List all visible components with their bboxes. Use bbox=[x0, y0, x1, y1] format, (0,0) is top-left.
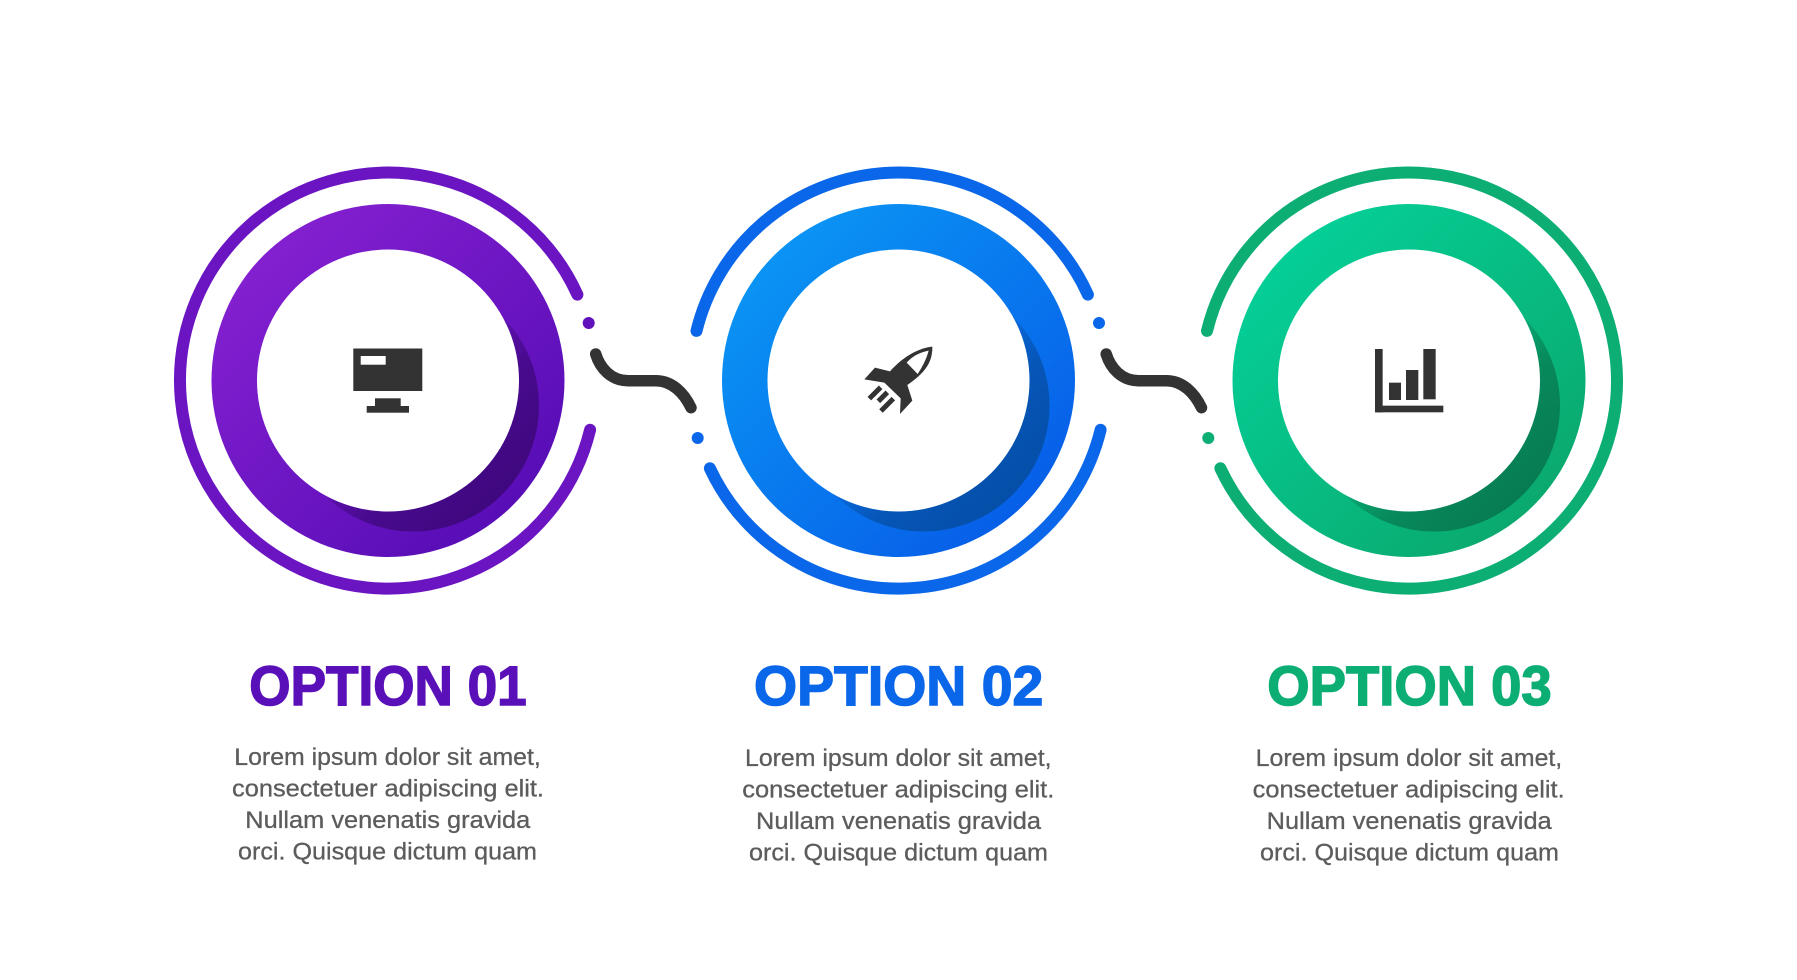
dot: blue left bbox=[692, 432, 704, 444]
dot: blue right bbox=[1093, 317, 1105, 329]
inner white circle bbox=[768, 250, 1030, 512]
text block: option 01 body: consectetuer adipiscing elit. bbox=[232, 776, 544, 802]
panel: option 01 bbox=[180, 173, 595, 866]
panel: option 02 bbox=[692, 173, 1105, 866]
text block: option 02 body: Nullam venenatis gravida bbox=[756, 808, 1042, 835]
connector: option 02 to option 03 bbox=[1106, 354, 1202, 408]
outer ring: blue bottom arc bbox=[710, 430, 1101, 589]
text block: option 03 body: Nullam venenatis gravida bbox=[1267, 808, 1552, 835]
outer ring: blue top arc bbox=[696, 173, 1088, 331]
ring: blue gradient bbox=[722, 204, 1075, 557]
text block: option 01 body: Lorem ipsum dolor sit amet, bbox=[234, 744, 541, 771]
text block: option 01 body bbox=[232, 744, 544, 866]
text block: option 02 body bbox=[742, 745, 1054, 866]
text block: option 01 body: Nullam venenatis gravida bbox=[245, 807, 531, 834]
text block: option 01 body: orci. Quisque dictum quam bbox=[238, 838, 537, 866]
inner white circle bbox=[257, 250, 519, 512]
ring: green gradient bbox=[1232, 204, 1586, 557]
ring shadow: blue bbox=[798, 280, 1050, 532]
outer ring: green arc bbox=[1207, 173, 1617, 589]
text block: option 02 body: consectetuer adipiscing elit. bbox=[742, 776, 1054, 804]
ring shadow: green bbox=[1308, 280, 1560, 532]
outer ring: purple arc bbox=[180, 173, 590, 589]
icon: monitor bbox=[353, 348, 422, 413]
text block: option 03 body: Lorem ipsum dolor sit amet, bbox=[1256, 745, 1562, 772]
dot: green bbox=[1202, 432, 1214, 444]
text block: option 03 body: consectetuer adipiscing elit. bbox=[1253, 776, 1565, 804]
text block: option 02 body: orci. Quisque dictum quam bbox=[749, 840, 1048, 866]
ring: purple gradient bbox=[212, 204, 564, 557]
text block: option 03 body bbox=[1253, 745, 1565, 866]
icon: rocket bbox=[864, 347, 932, 414]
panel: option 03 bbox=[1202, 173, 1617, 867]
text block: option 02 body: Lorem ipsum dolor sit amet, bbox=[745, 745, 1052, 772]
inner white circle bbox=[1278, 250, 1540, 512]
heading: option 03: OPTION 03 bbox=[1267, 654, 1552, 717]
heading: option 02: OPTION 02 bbox=[754, 654, 1043, 717]
connector: option 01 to option 02 bbox=[596, 354, 691, 408]
text block: option 03 body: orci. Quisque dictum quam bbox=[1260, 840, 1559, 866]
dot: purple bbox=[583, 317, 595, 329]
icon: bar chart bbox=[1375, 349, 1443, 412]
ring shadow: purple bbox=[287, 280, 539, 532]
heading: option 01: OPTION 01 bbox=[249, 654, 527, 717]
